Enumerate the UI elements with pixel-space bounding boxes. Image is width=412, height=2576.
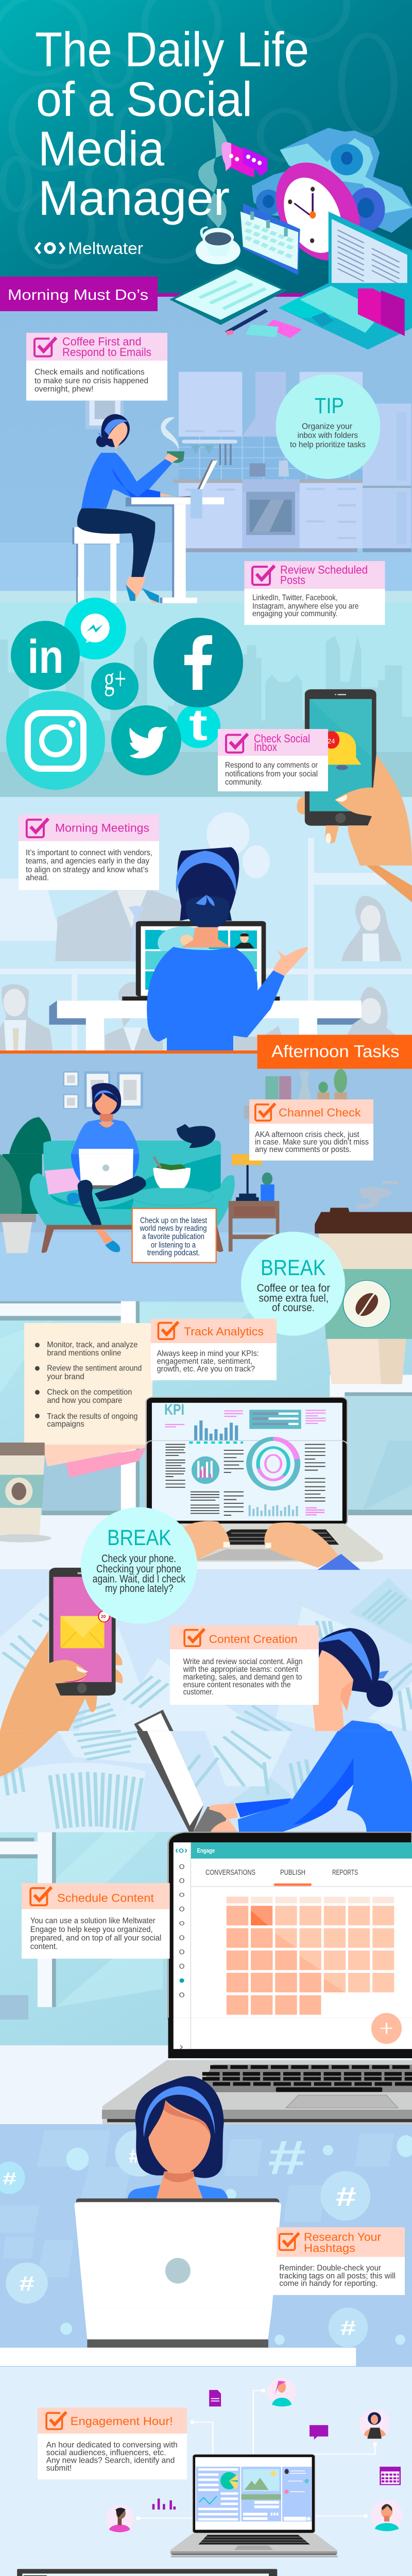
callout: world news note: or listening to a [151,1241,196,1249]
callout: world news note: a favorite publication [142,1232,204,1241]
illustration: stool and feet [76,577,197,603]
icon: google plus [91,662,139,710]
icon: checkbox [35,337,56,357]
text block [183,1657,303,1697]
text block: engaging your community. [252,609,338,618]
illustration: hashtag background bubbles: # [340,2317,356,2340]
heading: Hashtags [304,2242,355,2255]
text block: growth, etc. Are you on track? [157,1365,255,1374]
illustration: scattered papers background [0,1578,412,1832]
text block [290,422,366,449]
text block: Check on the competition [47,1388,132,1397]
text block [46,2441,178,2473]
text block: come in handy for reporting. [279,2279,377,2288]
illustration: video meeting background and woman at laptop [0,812,412,1050]
illustration: phone with notification bell in hand [297,689,412,866]
heading: Schedule Content [57,1891,154,1904]
icon: small coffee cup [0,1443,51,1543]
heading: Posts [280,574,305,587]
panel: card Check Social Inbox [218,729,328,791]
heading: Review Scheduled [280,564,368,577]
text block: submit! [46,2464,72,2473]
text block: of course. [272,1302,315,1314]
icon: linkedin: in [28,631,64,683]
text block: inbox with folders [298,431,358,440]
panel: card Coffee First [26,333,167,401]
illustration: engagement network with laptop, people and icons [107,2378,403,2557]
text block: notifications from your social [225,770,318,778]
text block: customer. [183,1688,214,1697]
heading: BREAK [107,1526,171,1550]
panel: card Morning Meetings [19,815,159,890]
text block: engagement rate, sentiment, [157,1357,252,1366]
text block: to make sure no crisis happened [35,377,148,385]
panel: card Research Your Hashtags [273,2227,405,2295]
icon: linkedin [11,621,80,690]
icon: checkbox [158,1322,178,1339]
panel: card Content Creation [170,1625,319,1705]
text block: again. Wait, did I check [93,1573,185,1585]
icon: twitter [111,705,181,775]
illustration: office window, KPI laptop, coffee cups [0,1301,412,1515]
illustration: hashtag background bubbles: # [336,2182,356,2212]
panel: card Engagement Hour [38,2408,187,2479]
title: of a Social [36,72,252,127]
illustration: phone with notification bell in hand: 24 [328,737,335,745]
text block: Write and review social content. Align [183,1657,303,1666]
icon: checkbox [184,1629,204,1646]
logo: Meltwater: Meltwater [68,239,143,258]
text block: Reminder: Double-check your [279,2264,382,2273]
text block [47,1341,142,1429]
text block: with the appropriate teams: content [183,1665,299,1674]
text block: Checking your phone [96,1563,181,1575]
text block: AKA afternoon crisis check, just [255,1130,359,1139]
text block: tracking tags on all posts; this will [279,2272,396,2280]
text block [30,1917,161,1951]
panel: BREAK phone callout [81,1507,197,1624]
icon: tumblr [176,706,220,748]
illustration: hand holding phone with new message [0,1568,123,1776]
heading: Morning Meetings [55,822,149,835]
text block [258,1284,330,1311]
text block: Engage to help keep you organized, [30,1925,153,1934]
heading: Track Analytics [184,1325,264,1338]
heading: Content Creation [209,1633,298,1646]
text block: social audiences, influencers, etc. [46,2449,166,2458]
panel: card Channel Check [249,1099,373,1160]
heading: Channel Check [279,1106,362,1119]
callout: world news note: trending podcast. [147,1248,200,1257]
text block: to align on strategy and know what’s [26,866,148,874]
heading: Afternoon Tasks [0,1035,412,1069]
text block: It’s important to connect with vendors, [26,849,152,857]
illustration: media planning board and woman at desk [0,2569,412,2576]
heading: Morning Must Do's [0,277,158,311]
illustration: kitchen with woman drinking coffee [72,372,411,577]
text block: Check emails and notifications [35,368,145,377]
text block: content. [30,1942,58,1951]
illustration: woman working on laptop in profile [134,1628,412,1832]
text block: my phone lately? [105,1583,174,1595]
text block [225,761,318,787]
icon: checkbox [252,566,274,585]
callout: world news note: Check up on the latest [140,1216,208,1225]
text block: to help prioritize tasks [290,440,366,449]
text block: Any new leads? Search, identify and [46,2456,175,2465]
text block [279,2264,396,2288]
illustration: Engage scheduling app on laptop: REPORTS [332,1868,358,1877]
heading: TIP [315,394,344,418]
text block [157,1349,259,1374]
icon: checkbox [27,819,48,837]
illustration: hashtag background bubbles: # [268,2130,306,2184]
panel: card Track Analytics [151,1319,277,1380]
text block: Instagram, anywhere else you are [252,602,359,611]
heading [304,2231,381,2255]
text block: Monitor, track, and analyze [47,1341,138,1349]
icons: social media network badges [6,598,243,790]
text block: any new comments or posts. [255,1145,351,1154]
text block: brand mentions online [47,1349,121,1358]
title: Manager [38,171,230,226]
illustration: Engage scheduling app on laptop: PUBLISH [280,1868,305,1877]
icon: messenger [64,598,126,659]
heading: Research Your [304,2231,381,2244]
text block: LinkedIn, Twitter, Facebook, [252,594,338,602]
title: Media [38,122,164,176]
text block [26,849,152,883]
text block: some extra fuel, [259,1292,329,1304]
illustration: hashtag background bubbles: # [3,2169,16,2188]
callout: world news note [132,1209,216,1263]
text block: Track the results of ongoing [47,1412,138,1421]
heading: Engagement Hour! [71,2415,173,2428]
panel: bullet list note with sticky pages [24,1323,152,1478]
text block: in case. Make sure you didn’t miss [255,1138,369,1147]
illustration: office window behind engage laptop [0,1832,163,2020]
text block: An hour dedicated to conversing with [46,2441,178,2450]
text block [252,594,359,618]
icon: checkbox [279,2233,299,2250]
icon: checkbox [46,2412,66,2429]
illustration: hand holding phone with new message: 20 [101,1614,106,1619]
illustration: hashtag background bubbles: # [19,2273,35,2295]
text block: your brand [47,1372,84,1381]
text block: community. [225,778,263,787]
panel: card Review Scheduled Posts [244,561,385,625]
text block [35,368,148,394]
illustration: hashtag background bubbles [0,2129,412,2347]
text block: teams, and agencies early in the day [26,857,149,866]
icon: google plus: g+ [104,662,126,697]
logo: Meltwater [34,242,143,255]
illustration: city skyline [0,636,412,797]
heading: Coffee First and [62,335,141,348]
icon: instagram [6,691,105,790]
header illustration: clocks, gears, calendar, coffee, devices [0,0,412,294]
text block: Review the sentiment around [47,1364,142,1373]
text block: Check your phone. [101,1553,176,1565]
text block: Respond to any comments or [225,761,318,770]
icon: facebook [153,618,243,707]
icon: checkbox [255,1104,275,1121]
illustration: Engage scheduling app on laptop: Engage [197,1847,215,1854]
text block: prepared, and on top of all your social [30,1934,161,1942]
illustration: large takeaway coffee cup [315,1181,412,1384]
panel: TIP inbox folders [276,374,380,479]
illustration: Engage scheduling app on laptop: CONVERSATIONS [205,1868,255,1877]
illustration: woman behind white laptop, front view [0,2076,412,2367]
heading [254,732,310,753]
chart: KPI dashboard laptop [146,1397,383,1570]
text block: campaigns [47,1420,84,1429]
illustration: woman on couch with laptop, salad and cat [0,1069,347,1253]
callout: world news note: world news by reading [140,1224,207,1233]
text block: Coffee or tea for [256,1282,330,1294]
text block [255,1130,369,1154]
text block: ahead. [26,874,49,883]
icon: checkbox [226,734,248,753]
text block: and how you compare [47,1396,122,1405]
text block [93,1553,185,1595]
text block: Always keep in mind your KPIs: [157,1349,259,1358]
icon: tumblr: t [189,700,208,750]
title [35,23,309,226]
text block: ensure content resonates with the [183,1681,291,1689]
illustration: hashtag background bubbles: # [129,2146,140,2167]
text block: marketing, sales, and demand gen to [183,1673,302,1682]
text block: You can use a solution like Meltwater [30,1917,156,1925]
heading: Inbox [254,741,277,753]
title: The Daily Life [35,23,309,77]
panel: card Schedule Content [22,1883,170,1959]
text block: Organize your [302,422,353,431]
heading [280,564,368,587]
text block: overnight, phew! [35,385,94,394]
heading: Check Social [254,732,310,745]
chart: KPI dashboard laptop: KPI [164,1401,184,1418]
panel: BREAK coffee callout [241,1232,345,1336]
heading: Afternoon Tasks: Afternoon Tasks [271,1042,400,1061]
icon: checkbox [30,1887,52,1905]
heading: Morning Must Do's: Morning Must Do’s [8,287,148,303]
heading [62,335,151,359]
icon: tablet, laptop, envelope and pencil on desk [169,266,412,350]
illustration: Engage scheduling app on laptop [102,1832,412,2125]
heading: BREAK [261,1256,326,1280]
heading: Respond to Emails [62,346,151,359]
